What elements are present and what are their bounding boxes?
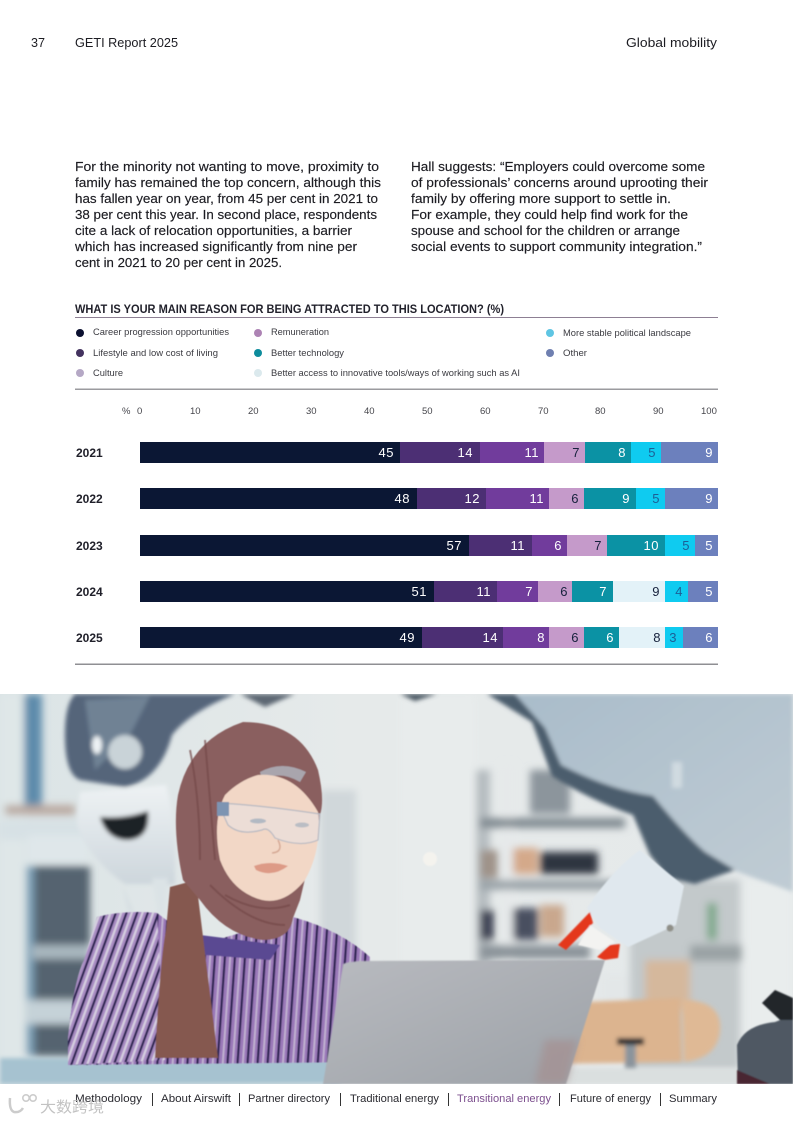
stacked bar: 2025: 14	[483, 630, 498, 645]
stacked bar: 2025: 2025	[76, 631, 103, 645]
text block: right column: family by offering more support to settle in.	[411, 191, 671, 206]
text block: right column: social events to support community integration.”	[411, 239, 702, 254]
footer navigation: Transitional energy	[457, 1093, 552, 1105]
stacked bar: 2021	[76, 442, 718, 463]
stacked bar: 2025: 8	[653, 630, 661, 645]
watermark	[10, 1095, 104, 1116]
chart legend: Better access to innovative tools/ways of working such as AI	[271, 368, 520, 379]
stacked bar: 2024: 9	[652, 584, 660, 599]
icon: woman with hijab and safety glasses	[68, 722, 372, 1065]
stacked bar: 2021: 9	[705, 445, 713, 460]
stacked bar: 2025: 3	[669, 630, 677, 645]
text block: right column	[411, 159, 709, 254]
stacked bar: 2025: 8	[537, 630, 545, 645]
text block: right column: spouse and school for the children or arrange	[411, 223, 680, 238]
stacked bar: 2023: 5	[682, 538, 690, 553]
footer navigation: Partner directory	[248, 1093, 330, 1105]
page number: 37	[31, 35, 45, 50]
chart axis: 90	[653, 406, 664, 417]
text block: left column	[74, 159, 382, 270]
chart axis: 40	[364, 406, 375, 417]
stacked bar: 2021: 2021	[76, 446, 103, 460]
footer navigation	[75, 1093, 718, 1106]
chart axis: 100	[701, 406, 717, 417]
stacked bar: 2024	[76, 581, 718, 602]
stacked bar: 2022: 5	[652, 491, 660, 506]
stacked bar: 2024: 7	[599, 584, 607, 599]
chart axis	[122, 406, 717, 417]
text block: left column: family has remained the top concern, although this	[75, 175, 382, 190]
stacked bar: 2023: 11	[510, 538, 525, 553]
stacked bar: 2024: 7	[525, 584, 533, 599]
stacked bar: 2024: 51	[412, 584, 427, 599]
watermark: 大数跨境	[40, 1098, 104, 1116]
chart legend: More stable political landscape	[563, 328, 691, 339]
footer navigation: Future of energy	[570, 1093, 651, 1105]
chart axis: 0	[137, 406, 142, 417]
stacked bar: 2022: 48	[395, 491, 410, 506]
chart legend	[76, 327, 691, 379]
chart legend: Better technology	[271, 348, 344, 359]
stacked bar: 2021: 45	[379, 445, 394, 460]
text block: right column: Hall suggests: “Employers could overcome some	[411, 159, 705, 174]
stacked bar: 2022: 6	[571, 491, 579, 506]
stacked bar: 2024: 6	[560, 584, 568, 599]
icon: dark machine corner	[737, 990, 793, 1084]
text block: left column: 38 per cent this year. In second place, respondents	[75, 207, 378, 222]
chart axis: 80	[595, 406, 606, 417]
chart axis: 60	[480, 406, 491, 417]
footer navigation: Summary	[669, 1093, 718, 1105]
stacked bar: 2022: 9	[622, 491, 630, 506]
stacked bar: 2023: 10	[644, 538, 659, 553]
chart legend: Lifestyle and low cost of living	[93, 348, 218, 359]
stacked bar: 2025: 6	[606, 630, 614, 645]
footer navigation: Methodology	[75, 1093, 143, 1105]
text block: left column: For the minority not wanting to move, proximity to	[75, 159, 379, 174]
text block: left column: cent in 2021 to 20 per cent in 2025.	[75, 255, 282, 270]
chart axis: 30	[306, 406, 317, 417]
desk surface	[0, 1058, 340, 1084]
stacked bar: 2025: 6	[705, 630, 713, 645]
text block: left column: which has increased significantly from nine per	[74, 239, 358, 254]
photo: engineer at laptop with robotic arms	[0, 694, 793, 1084]
section title: Global mobility	[626, 36, 718, 50]
chart legend: Other	[563, 348, 587, 359]
stacked bar: 2025: 6	[571, 630, 579, 645]
chart axis: %	[122, 406, 131, 417]
stacked bar: 2024: 4	[675, 584, 683, 599]
footer navigation: About Airswift	[161, 1093, 231, 1105]
stacked bar: 2023: 7	[594, 538, 602, 553]
stacked bar: 2024: 11	[476, 584, 491, 599]
stacked bar: 2021: 7	[572, 445, 580, 460]
stacked bar: 2021: 14	[458, 445, 473, 460]
text block: right column: For example, they could help find work for the	[411, 207, 688, 222]
chart axis: 10	[190, 406, 201, 417]
stacked bar: 2022	[76, 488, 718, 509]
icon: tan chairs	[572, 998, 722, 1070]
icon: right robot arm	[400, 694, 793, 892]
stacked bar: 2024: 2024	[76, 585, 103, 599]
stacked bar: 2024: 5	[705, 584, 713, 599]
chart legend: Culture	[93, 368, 123, 379]
text block: right column: of professionals’ concerns around uprooting their	[411, 175, 709, 190]
chart axis: 20	[248, 406, 259, 417]
stacked bar: 2023: 2023	[76, 539, 103, 553]
chart axis: 50	[422, 406, 433, 417]
text block: left column: has fallen year on year, from 45 per cent in 2021 to	[75, 191, 378, 206]
stacked bar: 2021: 5	[648, 445, 656, 460]
chart legend: Remuneration	[271, 327, 329, 338]
icon: laptop	[323, 960, 605, 1084]
stacked bar: 2021: 11	[524, 445, 539, 460]
stacked bar: 2025: 49	[400, 630, 415, 645]
stacked bar: 2022: 11	[530, 491, 544, 506]
chart axis: 70	[538, 406, 549, 417]
chart legend: Career progression opportunities	[93, 327, 229, 338]
stacked bar: 2023: 6	[554, 538, 562, 553]
stacked bar: 2023	[76, 535, 718, 556]
icon: left robot arm	[62, 694, 295, 885]
text block: left column: cite a lack of relocation opportunities, a barrier	[75, 223, 353, 238]
stacked bar: 2021: 8	[618, 445, 626, 460]
stacked bar: 2022: 9	[705, 491, 713, 506]
stacked bar: 2023: 5	[705, 538, 713, 553]
stacked bar: 2023: 57	[447, 538, 462, 553]
footer navigation: Traditional energy	[350, 1093, 440, 1105]
stacked bar: 2022: 12	[465, 491, 480, 506]
stacked bar: 2022: 2022	[76, 492, 103, 506]
stacked bar: 2025	[76, 627, 718, 648]
icon: robot gripper	[558, 850, 684, 960]
report title: GETI Report 2025	[75, 35, 178, 50]
chart heading: WHAT IS YOUR MAIN REASON FOR BEING ATTRACTED TO THIS LOCATION? (%)	[75, 302, 504, 316]
